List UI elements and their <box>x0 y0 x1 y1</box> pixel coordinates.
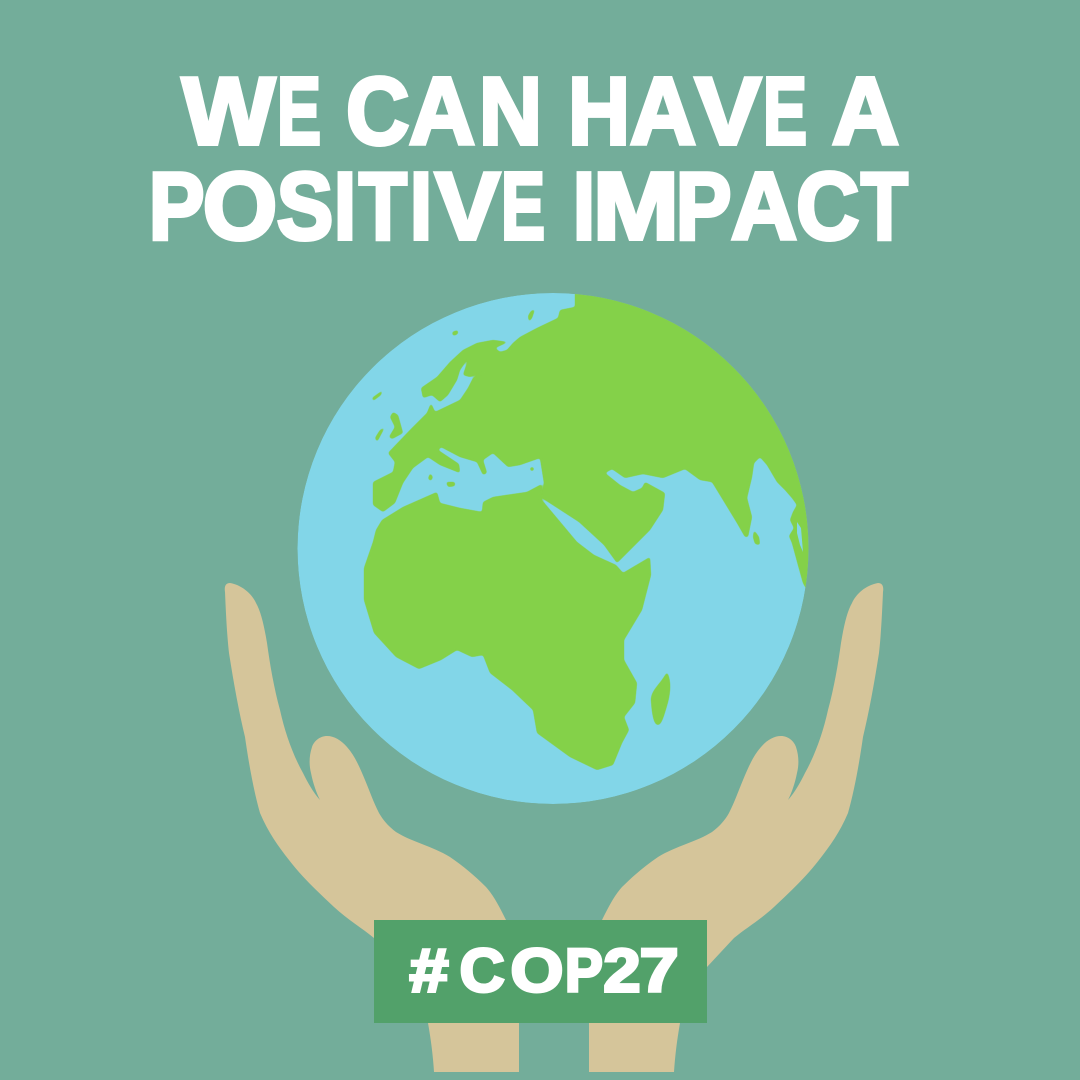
title: W <box>182 58 275 165</box>
icon: left hand <box>225 583 519 1072</box>
title: S <box>277 153 333 260</box>
title: P <box>676 153 731 260</box>
icon: globe <box>298 280 830 804</box>
title: T <box>359 153 407 260</box>
title: I <box>334 153 356 260</box>
title: C <box>796 153 859 260</box>
title: T <box>861 153 908 260</box>
title: A <box>832 58 899 165</box>
land: islands <box>372 309 760 545</box>
title <box>149 58 908 260</box>
title: N <box>479 58 542 165</box>
title: I <box>410 153 432 260</box>
title: E <box>277 58 321 165</box>
land masses <box>364 280 830 770</box>
globe ocean <box>298 293 808 804</box>
hashtag badge <box>374 920 707 1023</box>
title: C <box>346 58 409 165</box>
title: A <box>630 58 696 165</box>
title: A <box>731 153 797 260</box>
title: E <box>763 58 807 165</box>
title: O <box>203 153 277 260</box>
hashtag badge: 7 <box>640 936 679 1004</box>
hashtag badge: P <box>565 936 603 1004</box>
hashtag badge: C <box>460 936 505 1004</box>
title: E <box>501 153 545 260</box>
title: H <box>568 58 630 165</box>
title: I <box>573 153 595 260</box>
infographic canvas <box>152 75 909 1072</box>
land: Africa <box>364 484 651 770</box>
land: Madagascar <box>651 672 670 725</box>
land: Eurasia <box>372 294 808 588</box>
title: M <box>593 153 679 260</box>
sea inlet among southeast Asian islands <box>797 522 803 552</box>
title: V <box>695 58 761 165</box>
hashtag badge: 2 <box>603 936 641 1004</box>
title: P <box>149 153 204 260</box>
title: A <box>409 58 475 165</box>
icon: right hand <box>589 583 883 1072</box>
hashtag badge: O <box>510 936 563 1004</box>
hashtag badge: # <box>410 936 448 1004</box>
title: V <box>435 153 500 260</box>
